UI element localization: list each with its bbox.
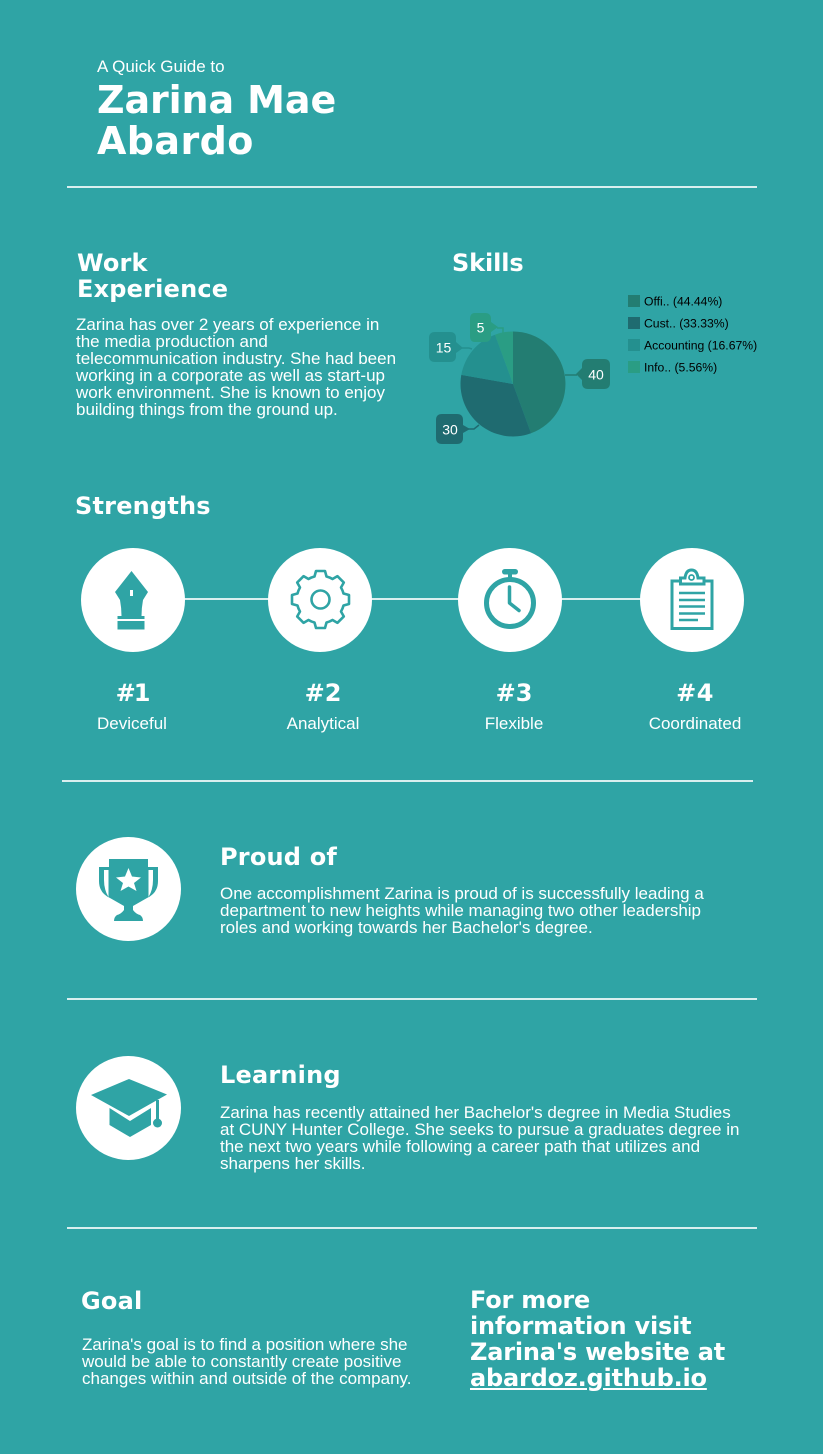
- text: goal: Zarina's goal is to find a position where she: [82, 1335, 407, 1354]
- text: proud of: [220, 884, 704, 937]
- subtitle: A Quick Guide to: [97, 57, 225, 76]
- legend: Cust.. (33.33%): [644, 316, 729, 330]
- strength 3: [485, 679, 543, 733]
- strength 2: Analytical: [287, 714, 359, 733]
- call to action: website: information visit: [470, 1312, 691, 1340]
- panel: learning: [220, 1061, 739, 1173]
- heading: work experience: Work: [77, 249, 148, 277]
- text: goal: would be able to constantly create positive: [82, 1352, 401, 1371]
- text: work experience: Zarina has over 2 years of experience in: [76, 315, 379, 334]
- panel: proud of: [220, 843, 704, 937]
- strength 4: [649, 679, 741, 733]
- icon: gear: [268, 548, 372, 652]
- strength 4: Coordinated: [649, 714, 741, 733]
- legend: Info.. (5.56%): [644, 360, 717, 374]
- heading: goal: Goal: [81, 1287, 142, 1315]
- legend: Accounting (16.67%): [644, 338, 757, 352]
- text: learning: at CUNY Hunter College. She seeks to pursue a graduates degree in: [220, 1120, 739, 1139]
- chart: skills pie: [429, 294, 757, 444]
- text: work experience: telecommunication industry. She had been: [76, 349, 396, 368]
- text: learning: [220, 1103, 739, 1173]
- text: goal: [82, 1335, 412, 1388]
- heading: skills: Skills: [452, 249, 524, 277]
- strength 1: Deviceful: [97, 714, 167, 733]
- icon: clipboard: [640, 548, 744, 652]
- header block: [97, 57, 336, 163]
- title: Zarina Mae: [97, 78, 336, 122]
- panel: work experience: [76, 249, 396, 419]
- callout: 30: [436, 414, 479, 444]
- icon: pen nib: [81, 548, 185, 652]
- text: work experience: building things from the ground up.: [76, 400, 338, 419]
- callout: 30: 30: [442, 422, 458, 438]
- heading: proud of: Proud of: [220, 843, 337, 871]
- text: work experience: work environment. She is known to enjoy: [76, 383, 385, 402]
- text: work experience: [76, 315, 396, 419]
- heading: work experience: [77, 249, 228, 303]
- legend: Offi.. (44.44%): [644, 294, 722, 308]
- heading: strengths: Strengths: [75, 492, 211, 520]
- pie slices: [461, 332, 565, 436]
- callout: 5: [470, 313, 503, 342]
- call to action: website: Zarina's website at: [470, 1338, 725, 1366]
- text: work experience: the media production and: [76, 332, 268, 351]
- text: learning: the next two years while following a career path that utilizes and: [220, 1137, 700, 1156]
- text: work experience: working in a corporate as well as start-up: [76, 366, 385, 385]
- strength 3: #3: [496, 679, 532, 707]
- heading: learning: Learning: [220, 1061, 341, 1089]
- text: learning: sharpens her skills.: [220, 1154, 366, 1173]
- icon: trophy: [76, 837, 181, 941]
- text: goal: changes within and outside of the company.: [82, 1369, 412, 1388]
- callout: 40: 40: [588, 366, 604, 382]
- callout: 5: 5: [477, 320, 485, 336]
- callout: 40: [565, 359, 610, 389]
- strength 1: #1: [116, 679, 148, 707]
- callout: 15: [429, 332, 472, 362]
- text: proud of: department to new heights while managing two other leadership: [220, 901, 701, 920]
- legend: [628, 294, 757, 374]
- icon: graduation cap: [76, 1056, 181, 1160]
- text: proud of: One accomplishment Zarina is proud of is successfully leading a: [220, 884, 704, 903]
- heading: work experience: Experience: [77, 275, 228, 303]
- icon: stopwatch: [458, 548, 562, 652]
- strength 3: Flexible: [485, 714, 543, 733]
- strength 2: #2: [305, 679, 341, 707]
- callout: 15: 15: [436, 340, 451, 356]
- title: [97, 78, 336, 163]
- call to action: website: [470, 1286, 725, 1392]
- text: learning: Zarina has recently attained her Bachelor's degree in Media Studies: [220, 1103, 731, 1122]
- text: proud of: roles and working towards her Bachelor's degree.: [220, 918, 593, 937]
- strength 4: #4: [676, 679, 714, 707]
- strength 2: [286, 679, 359, 733]
- title: Abardo: [97, 119, 254, 163]
- call to action: website: For more: [470, 1286, 590, 1314]
- panel: goal: [81, 1287, 412, 1388]
- strength 1: [97, 679, 167, 733]
- call to action: website: abardoz.github.io: [470, 1364, 707, 1392]
